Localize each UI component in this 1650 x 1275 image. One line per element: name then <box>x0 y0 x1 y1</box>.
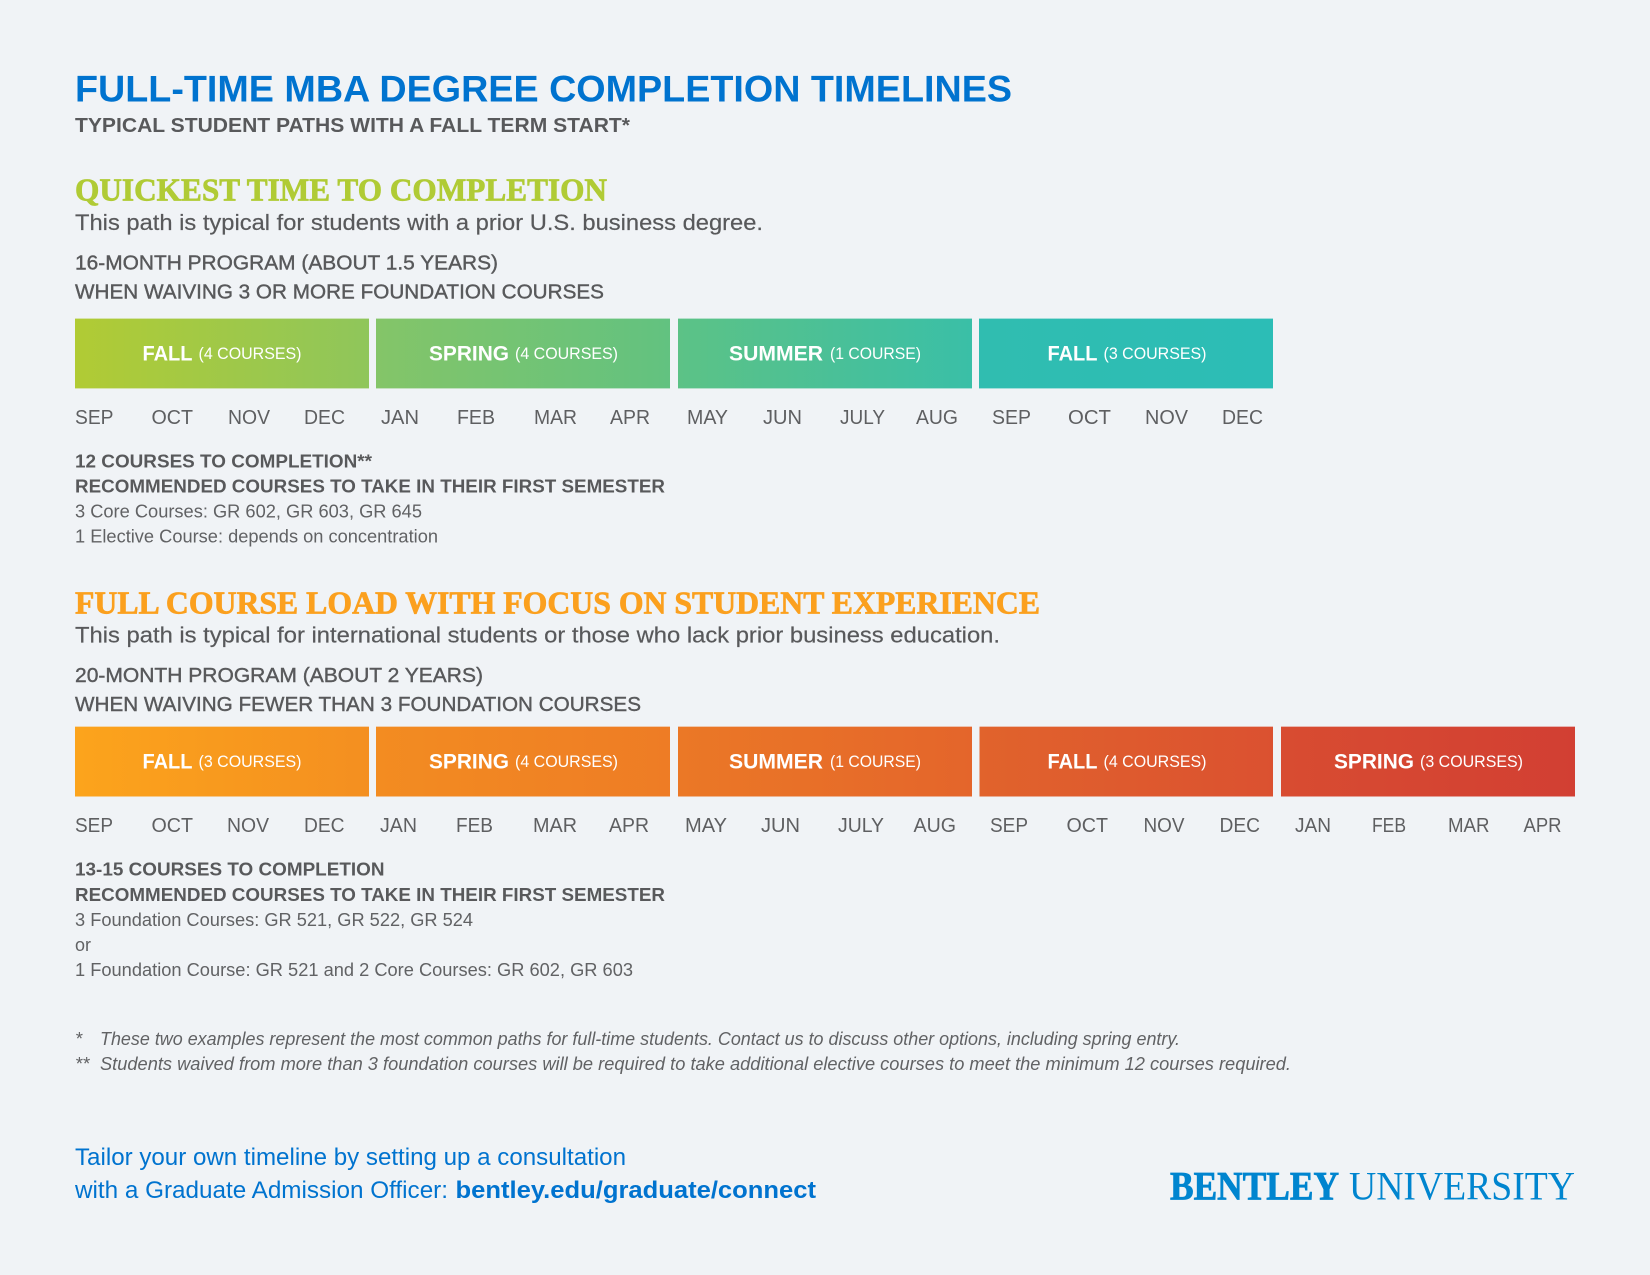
term: fall 3 courses <box>979 318 1273 389</box>
term: summer 1 course: SUMMER <box>729 750 823 773</box>
term: spring 3 courses: (3 COURSES) <box>1420 752 1523 771</box>
course details: 12 courses <box>75 450 665 546</box>
term: spring 4 courses <box>376 726 670 796</box>
footnotes: ** <box>75 1053 90 1074</box>
month axis: 20-month <box>75 815 1562 837</box>
term: fall 3 courses: FALL <box>142 750 193 773</box>
month axis: 16-month: MAR <box>534 407 577 429</box>
month axis: 20-month: MAR <box>1448 815 1490 837</box>
program length: 16 months: 16-MONTH PROGRAM (ABOUT 1.5 YEARS) <box>75 252 498 274</box>
term: spring 3 courses: SPRING <box>1334 750 1414 773</box>
month axis: 16-month: FEB <box>457 407 495 429</box>
month axis: 20-month: JUN <box>761 815 800 837</box>
logo: Bentley University: UNIVERSITY <box>1349 1164 1575 1208</box>
month axis: 16-month: DEC <box>304 407 345 429</box>
month axis: 20-month: JAN <box>1295 815 1331 837</box>
month axis: 20-month: AUG <box>914 815 956 837</box>
month axis: 16-month: JUN <box>763 407 802 429</box>
month axis: 20-month: APR <box>1524 815 1562 837</box>
month axis: 20-month: MAY <box>685 815 727 837</box>
footnotes: * <box>75 1028 83 1049</box>
term: summer 1 course <box>678 318 972 389</box>
course details: 12 courses: 3 Core Courses: GR 602, GR 603, GR 645 <box>75 500 422 522</box>
month axis: 20-month: NOV <box>1144 815 1185 837</box>
term: fall 4 courses: FALL <box>142 342 193 365</box>
subtitle: TYPICAL STUDENT PATHS WITH A FALL TERM START* <box>75 114 630 137</box>
month axis: 16-month: JULY <box>840 407 885 429</box>
term: spring 4 courses: (4 COURSES) <box>515 752 618 771</box>
term: fall 4 courses: (4 COURSES) <box>198 344 302 363</box>
month axis: 16-month: SEP <box>75 407 114 429</box>
month axis: 16-month: NOV <box>1145 407 1189 429</box>
month axis: 20-month: JULY <box>838 815 884 837</box>
course details: 13-15 courses <box>75 859 665 980</box>
footnotes <box>75 1028 1291 1074</box>
term: fall 3 courses <box>75 726 369 796</box>
term: spring 4 courses <box>376 318 670 389</box>
term: fall 4 courses: (4 COURSES) <box>1104 752 1206 771</box>
term: spring 4 courses: SPRING <box>429 342 509 365</box>
month axis: 20-month: NOV <box>227 815 270 837</box>
waiver condition: fewer than 3: WHEN WAIVING FEWER THAN 3 FOUNDATION COURSES <box>75 693 641 716</box>
month axis: 20-month: MAR <box>533 815 577 837</box>
title: FULL-TIME MBA DEGREE COMPLETION TIMELINES <box>75 68 1012 110</box>
month axis: 16-month: APR <box>610 407 650 429</box>
timeline: 16-month terms <box>75 318 1273 389</box>
call to action: bentley.edu/graduate/connect <box>456 1177 816 1204</box>
course details: 13-15 courses: 13-15 COURSES TO COMPLETION <box>75 859 385 880</box>
footnotes: Students waived from more than 3 foundation courses will be required to take additional elective courses to meet the minimum 12 courses required. <box>100 1053 1291 1074</box>
heading: quickest time: QUICKEST TIME TO COMPLETION <box>75 172 607 208</box>
month axis: 16-month: OCT <box>1068 407 1111 429</box>
description: full course load path: This path is typical for international students or those who lack prior business education. <box>75 622 1000 648</box>
month axis: 16-month: JAN <box>381 407 419 429</box>
term: fall 4 courses: FALL <box>1048 750 1098 773</box>
program length: 20 months: 20-MONTH PROGRAM (ABOUT 2 YEARS) <box>75 664 483 687</box>
month axis: 20-month: OCT <box>1066 815 1108 837</box>
term: spring 4 courses: (4 COURSES) <box>515 344 618 363</box>
course details: 13-15 courses: 3 Foundation Courses: GR 521, GR 522, GR 524 <box>75 909 473 930</box>
month axis: 20-month: DEC <box>304 815 344 837</box>
description: quickest path: This path is typical for students with a prior U.S. business degree. <box>75 210 763 235</box>
panel: quickest time to completion <box>75 172 1273 546</box>
month axis: 16-month: MAY <box>687 407 728 429</box>
term: fall 4 courses <box>980 726 1273 796</box>
month axis: 20-month: APR <box>609 815 649 837</box>
course details: 13-15 courses: RECOMMENDED COURSES TO TAKE IN THEIR FIRST SEMESTER <box>75 884 665 905</box>
month axis: 16-month: AUG <box>916 407 958 429</box>
month axis: 20-month: OCT <box>152 815 193 837</box>
term: summer 1 course <box>678 726 972 796</box>
timeline: 20-month terms <box>75 726 1575 796</box>
month axis: 20-month: FEB <box>1372 815 1406 837</box>
course details: 12 courses: 12 COURSES TO COMPLETION** <box>75 450 373 472</box>
heading: full course load: FULL COURSE LOAD WITH FOCUS ON STUDENT EXPERIENCE <box>75 584 1040 620</box>
month axis: 20-month: DEC <box>1220 815 1260 837</box>
term: summer 1 course: SUMMER <box>729 342 823 365</box>
month axis: 16-month: OCT <box>152 407 193 429</box>
course details: 13-15 courses: or <box>75 934 91 955</box>
term: spring 3 courses <box>1281 726 1575 796</box>
term: fall 4 courses <box>75 318 369 389</box>
call to action: Tailor your own timeline by setting up a consultation <box>75 1144 626 1171</box>
course details: 12 courses: RECOMMENDED COURSES TO TAKE IN THEIR FIRST SEMESTER <box>75 476 665 496</box>
footnotes: These two examples represent the most common paths for full-time students. Contact us to discuss other options, including spring entry. <box>100 1028 1180 1049</box>
term: spring 4 courses: SPRING <box>429 750 509 773</box>
month axis: 20-month: JAN <box>380 815 417 837</box>
month axis: 16-month: SEP <box>992 407 1031 429</box>
logo: Bentley University <box>1170 1164 1575 1208</box>
month axis: 20-month: FEB <box>456 815 493 837</box>
panel: full course load <box>75 584 1575 980</box>
term: summer 1 course: (1 COURSE) <box>830 752 921 771</box>
term: fall 3 courses: (3 COURSES) <box>198 752 302 771</box>
month axis: 20-month: SEP <box>990 815 1028 837</box>
term: fall 3 courses: FALL <box>1048 342 1098 365</box>
month axis: 20-month: SEP <box>75 815 113 837</box>
month axis: 16-month <box>75 407 1263 429</box>
term: fall 3 courses: (3 COURSES) <box>1104 344 1206 363</box>
logo: Bentley University: BENTLEY <box>1170 1164 1339 1208</box>
month axis: 16-month: DEC <box>1222 407 1263 429</box>
course details: 13-15 courses: 1 Foundation Course: GR 521 and 2 Core Courses: GR 602, GR 603 <box>75 959 633 980</box>
call to action: with a Graduate Admission Officer: <box>74 1177 448 1204</box>
waiver condition: 3 or more: WHEN WAIVING 3 OR MORE FOUNDATION COURSES <box>75 280 604 304</box>
term: summer 1 course: (1 COURSE) <box>830 344 921 363</box>
call to action <box>74 1144 816 1204</box>
course details: 12 courses: 1 Elective Course: depends on concentration <box>75 526 438 546</box>
month axis: 16-month: NOV <box>228 407 271 429</box>
